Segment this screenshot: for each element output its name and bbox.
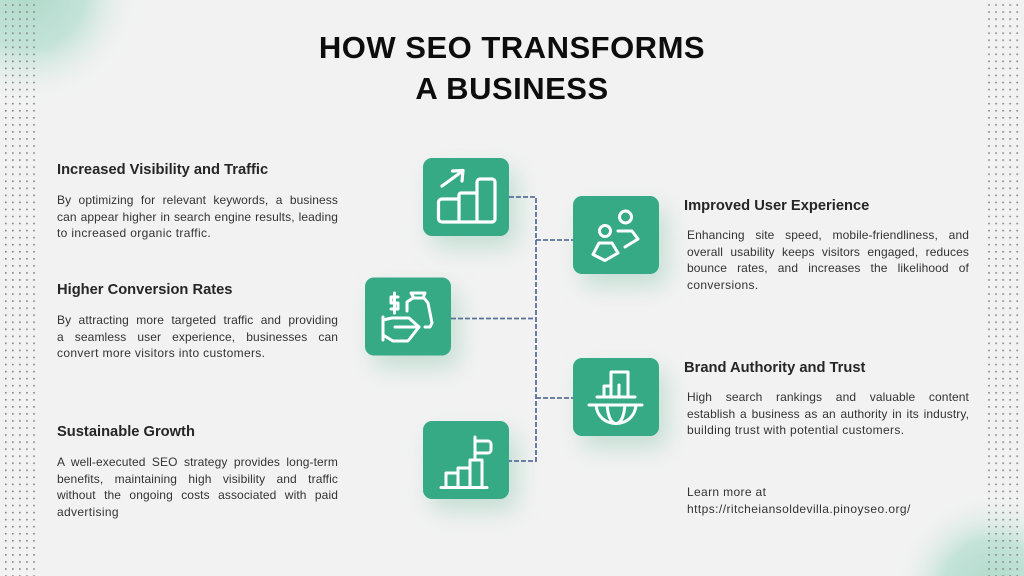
heading: improved user experience: Improved User Experience [684,198,869,214]
heading: sustainable growth: Sustainable Growth [57,424,195,440]
title [319,30,705,106]
connector lines [451,196,573,462]
heading: higher conversion rates: Higher Conversion Rates [57,282,232,298]
icon card: rising bar chart [420,158,528,258]
text: sustainable growth: without the ongoing costs associated with paid [57,488,338,502]
text: higher conversion rates: convert more visitors into customers. [57,346,265,360]
text: improved user experience: overall usability keeps visitors engaged, reduces [687,245,969,259]
icon card: users [570,196,678,296]
title: HOW SEO TRANSFORMS [319,30,705,65]
text: learn more link: Learn more at [687,485,766,499]
text: brand authority and trust: High search rankings and valuable content [687,390,969,404]
icon card: money in hand [362,278,470,378]
text: sustainable growth: A well-executed SEO strategy provides long-term [57,455,338,469]
text: improved user experience: bounce rates, and increases the likelihood of [687,261,969,275]
title: A BUSINESS [415,71,609,106]
heading: brand authority and trust: Brand Authority and Trust [684,360,865,376]
text: increased visibility and traffic: to increased organic traffic. [57,226,211,240]
text: learn more link [687,485,911,516]
text: increased visibility and traffic: By optimizing for relevant keywords, a business [57,193,338,207]
text: sustainable growth: advertising [57,505,119,519]
text: higher conversion rates: a seamless user experience, businesses can [57,330,338,344]
text: improved user experience: conversions. [687,278,759,292]
text: sustainable growth [57,455,338,519]
icon card: authority chart on globe [570,358,678,458]
icon card: growth with flag [420,421,528,522]
text: improved user experience: Enhancing site speed, mobile-friendliness, and [687,228,969,242]
text: learn more link: https://ritcheiansoldevilla.pinoyseo.org/ [687,502,911,516]
text: increased visibility and traffic [57,193,338,240]
text: brand authority and trust: establish a business as an authority in its industry, [687,407,969,421]
text: increased visibility and traffic: can appear higher in search engine results, leading [57,210,338,224]
text: sustainable growth: benefits, maintaining high visibility and traffic [57,472,338,486]
text: brand authority and trust: building trust with potential customers. [687,423,904,437]
text: higher conversion rates: By attracting more targeted traffic and providing [57,313,338,327]
text: higher conversion rates [57,313,338,360]
text: brand authority and trust [687,390,969,437]
text: improved user experience [687,228,969,292]
heading: increased visibility and traffic: Increased Visibility and Traffic [57,162,268,178]
